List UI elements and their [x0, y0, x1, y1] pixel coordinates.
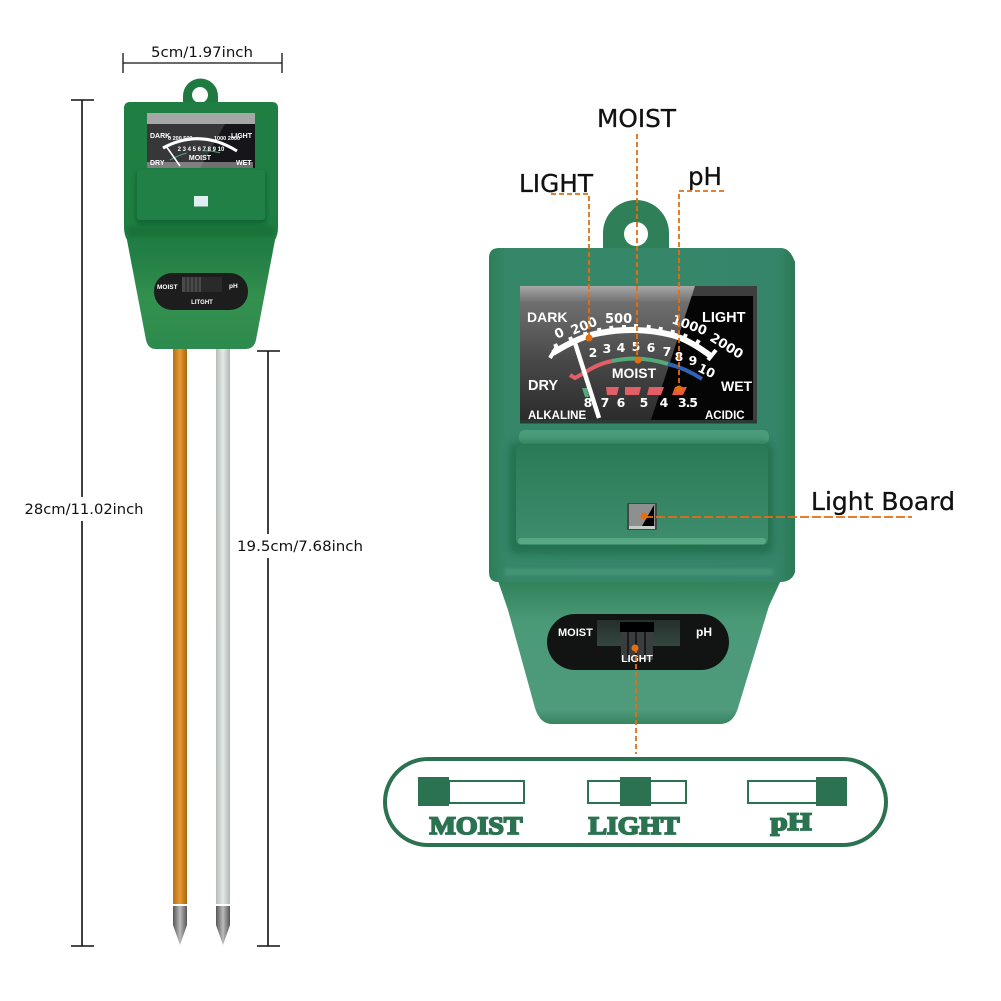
height dimension: total: [20, 100, 146, 946]
moisture scale numbers: 3: [603, 341, 611, 356]
legend: moist: [418, 777, 524, 840]
legend: pH: pH: [770, 807, 812, 836]
large meter: [489, 200, 795, 724]
callout: MOIST: MOIST: [597, 104, 677, 133]
callout: LIGHT: [519, 169, 594, 342]
small switch pill: LITGHT: [191, 300, 213, 306]
switch pill: pH: [696, 625, 712, 639]
dial bottom edge: [520, 420, 757, 424]
corner labels: MOIST: [612, 365, 657, 381]
corner labels: DRY: [528, 378, 558, 394]
small dial: 0 200 500: [168, 136, 192, 142]
small dial: WET: [236, 160, 252, 167]
small dial: [147, 113, 255, 168]
corner labels: WET: [721, 378, 753, 394]
small switch pill: pH: [229, 283, 238, 290]
callout: pH: [676, 162, 724, 392]
pH scale: 7: [601, 395, 609, 410]
switch pill: [547, 614, 729, 670]
small dial: DRY: [150, 160, 165, 167]
pH scale: 3.5: [678, 395, 698, 410]
callout: Light Board: Light Board: [811, 487, 955, 516]
corner labels: ACIDIC: [705, 410, 745, 422]
lower body: [497, 578, 782, 724]
moisture scale numbers: 8: [675, 349, 683, 364]
light scale arc: 200: [569, 315, 600, 339]
moisture scale numbers: 7: [663, 344, 671, 359]
pH scale: [582, 387, 698, 410]
callout: pH: pH: [688, 162, 722, 191]
width dimension: [123, 45, 282, 73]
body lower highlight: [505, 569, 773, 575]
legend: light: [588, 777, 686, 840]
moisture scale numbers: 5: [632, 339, 640, 354]
callout: LIGHT: LIGHT: [519, 169, 594, 198]
pH scale: 8: [584, 395, 592, 410]
height dimension: probes: 19.5cm/7.68inch: [237, 539, 363, 555]
needle: [575, 343, 599, 418]
legend: switch positions: [385, 759, 886, 845]
corner labels: ALKALINE: [528, 410, 586, 422]
light scale arc: 2000: [707, 331, 746, 363]
small dial: 1000 2000: [214, 136, 240, 142]
corner labels: DARK: [527, 309, 567, 325]
small dial: DARK: [150, 133, 170, 140]
moisture scale numbers: 2: [589, 345, 597, 360]
light scale arc: 1000: [670, 313, 709, 339]
light scale arc: [550, 312, 746, 363]
moisture scale numbers: 10: [696, 360, 718, 381]
small light panel: [136, 170, 266, 224]
corner labels: [527, 309, 753, 422]
small switch pill: MOIST: [157, 284, 178, 291]
small sensor: [194, 196, 208, 206]
legend: pH: [748, 777, 847, 836]
small body shading: [128, 226, 274, 236]
switch pill: MOIST: [558, 627, 593, 639]
light panel: [509, 442, 773, 554]
small body: [124, 102, 278, 349]
width dimension: 5cm/1.97inch: [151, 45, 253, 61]
moisture scale numbers: 9: [689, 353, 697, 368]
small dial: LIGHT: [231, 133, 253, 140]
light sensor: [627, 503, 657, 530]
pH scale: 5: [640, 395, 648, 410]
moisture scale numbers: [589, 339, 718, 381]
small dial: MOIST: [189, 155, 212, 162]
light scale arc: 0: [552, 325, 567, 343]
legend: moist: MOIST: [430, 811, 522, 840]
small meter with probes: [124, 78, 278, 945]
light scale arc: 500: [605, 312, 632, 327]
small dial: 2 3 4 5 6 7 8 9 10: [178, 147, 225, 153]
callout: Light Board: [640, 487, 955, 520]
legend: light: LIGHT: [588, 811, 680, 840]
light panel ridge: [519, 430, 769, 444]
dial: [520, 286, 757, 424]
switch pill: LIGHT: [621, 653, 653, 665]
small switch pill: [154, 273, 248, 310]
pH scale: 6: [617, 395, 626, 410]
callout: MOIST: [597, 104, 677, 364]
moisture scale numbers: 4: [617, 340, 626, 355]
moisture colored arc: [570, 359, 702, 379]
copper probe: [173, 348, 187, 945]
height dimension: total: 28cm/11.02inch: [24, 502, 144, 518]
corner labels: LIGHT: [702, 310, 746, 326]
upper body: [489, 248, 795, 582]
small hanging tab: [183, 78, 218, 104]
zinc probe: [216, 348, 230, 945]
hanging tab: [603, 200, 669, 252]
callout: switch leader: [632, 644, 638, 754]
height dimension: probes: [234, 351, 366, 946]
moisture scale numbers: 6: [647, 340, 656, 355]
legend outline: [385, 759, 886, 845]
dial glare: [520, 286, 695, 423]
pH scale: 4: [660, 395, 669, 410]
